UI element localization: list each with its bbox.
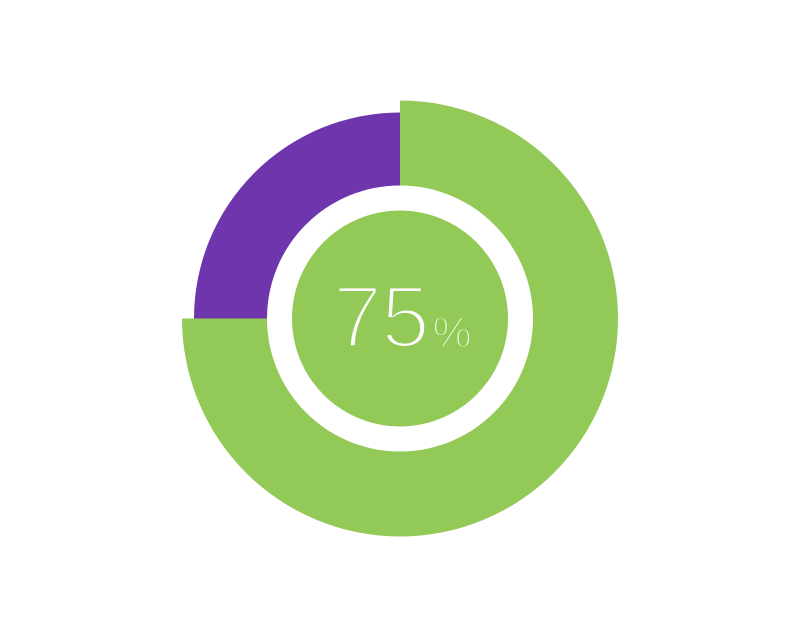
percentage label: % bbox=[432, 308, 472, 357]
inner circle bbox=[292, 210, 508, 426]
green segment 75% bbox=[182, 100, 618, 536]
purple segment 25% bbox=[194, 112, 400, 318]
percentage label bbox=[333, 267, 472, 366]
percentage label: 75 bbox=[333, 267, 429, 366]
